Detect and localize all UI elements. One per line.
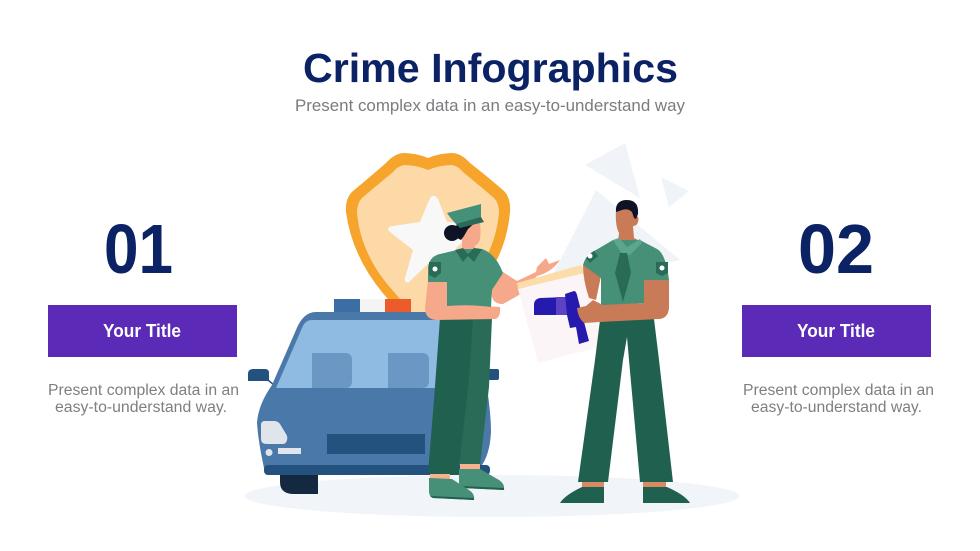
subtitle: Present complex data in an easy-to-understand way: [295, 97, 686, 115]
woman head: [444, 204, 484, 258]
car body: [257, 312, 491, 468]
icon: shield star: [388, 196, 479, 282]
grille: [327, 434, 425, 454]
man collar: [613, 238, 642, 255]
title bar 02: [742, 305, 931, 357]
title bar 01: [48, 305, 237, 357]
car mirrors: [248, 369, 499, 385]
number 01: 01: [104, 210, 173, 288]
man head: [616, 200, 640, 252]
officer: woman: [425, 204, 560, 500]
woman shoulder badge: [429, 262, 441, 278]
bumper: [264, 465, 490, 475]
wheel: [280, 475, 318, 494]
description 02: Present complex data in an: [743, 382, 934, 399]
ground shadow: [245, 475, 739, 517]
woman collar: [455, 248, 482, 262]
man trousers: [578, 319, 673, 482]
man shirt: [583, 240, 669, 306]
woman right arm and hand: [492, 258, 560, 304]
bar label 02: Your Title: [797, 321, 875, 341]
man tie: [615, 253, 631, 302]
icon: gun: [534, 291, 589, 344]
background triangles: [545, 143, 689, 290]
man shoes: [560, 482, 690, 503]
description 01: easy-to-understand way.: [55, 399, 227, 416]
description 02: easy-to-understand way.: [751, 399, 922, 416]
woman police cap: [447, 204, 484, 228]
officer: man: [560, 200, 690, 503]
evidence folder with gun: [517, 265, 603, 363]
number 02: 02: [798, 210, 874, 288]
illustration: police scene: [245, 143, 739, 517]
headlight: [261, 421, 287, 444]
icon: police shield: [346, 153, 510, 345]
police car: [248, 299, 499, 494]
woman shirt: [428, 249, 503, 307]
man shoulder badges: [586, 251, 668, 276]
description 01: Present complex data in an: [48, 382, 239, 399]
car seats: [312, 353, 429, 388]
man right arm and hand: [577, 280, 669, 323]
woman shoes: [429, 464, 504, 500]
panel: item 02: [742, 210, 934, 416]
woman left arm: [425, 280, 500, 320]
title: Crime Infographics: [303, 45, 678, 91]
bar label 01: Your Title: [103, 321, 181, 341]
windshield: [276, 320, 480, 388]
woman trousers: [428, 318, 492, 475]
panel: item 01: [48, 210, 239, 416]
folder sheet: [518, 273, 603, 363]
man left arm: [583, 265, 601, 300]
folder tab: [517, 265, 585, 289]
roof lights: [334, 299, 411, 312]
